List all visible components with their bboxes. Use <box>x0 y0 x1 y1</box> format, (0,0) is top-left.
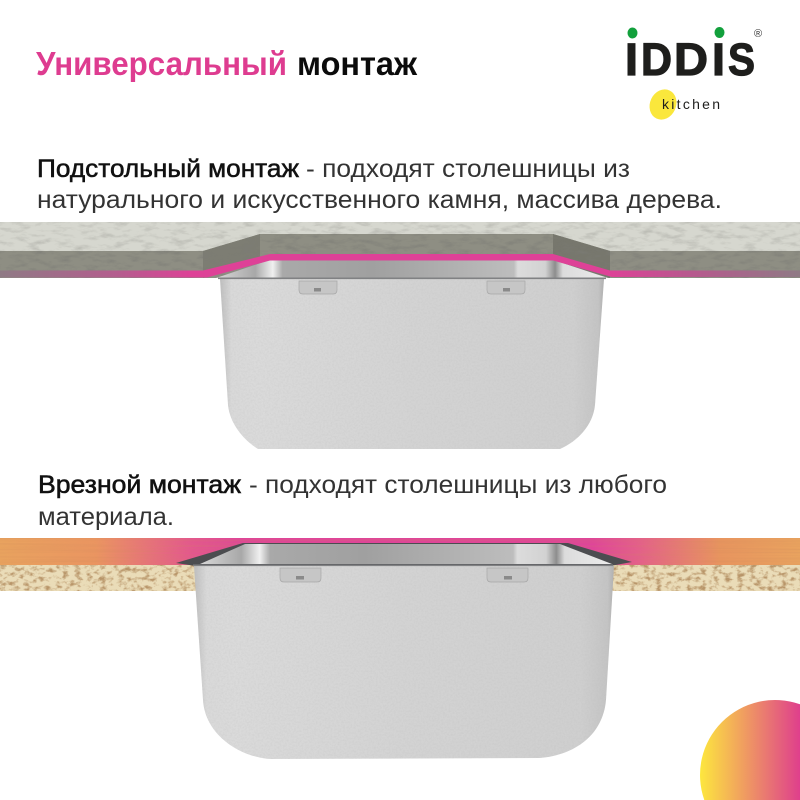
logo wordmark: I <box>625 34 638 85</box>
logo wordmark: S <box>728 34 755 85</box>
text block: under-counter mounting: Подстольный монтаж <box>37 155 299 183</box>
logo wordmark: D <box>674 34 708 85</box>
logo green dots <box>628 27 724 38</box>
sink body <box>215 278 610 450</box>
countertop stone <box>0 222 800 278</box>
text block: inset mounting: Врезной монтаж <box>38 471 241 499</box>
title <box>36 45 418 82</box>
clip left <box>299 281 337 294</box>
text block: under-counter mounting <box>37 155 722 214</box>
text block: under-counter mounting: натурального и искусственного камня, массива дерева. <box>37 186 722 214</box>
logo yellow blob <box>645 85 681 124</box>
logo kitchen text: kitchen <box>662 96 720 112</box>
logo wordmark: D <box>641 34 672 85</box>
sink body <box>190 566 620 760</box>
text block: inset mounting <box>38 471 667 531</box>
clip right <box>487 568 528 582</box>
illustration: under-counter sink <box>0 222 800 450</box>
clip left <box>280 568 321 582</box>
illustration: inset sink <box>0 538 800 760</box>
pink sealant band <box>0 254 800 278</box>
text block: under-counter mounting: - подходят столешницы из <box>306 155 630 183</box>
text block: inset mounting: - подходят столешницы из любого <box>249 471 667 499</box>
decorative gradient circle <box>700 700 800 800</box>
logo wordmark: I <box>712 34 725 85</box>
sink rim <box>218 278 606 279</box>
sink rim and interior <box>176 543 632 566</box>
countertop wood layer <box>0 538 800 565</box>
title: монтаж <box>297 45 418 82</box>
clip right <box>487 281 525 294</box>
text block: inset mounting: материала. <box>38 503 174 531</box>
registered mark: ® <box>754 28 762 40</box>
countertop chipboard layer <box>0 565 800 591</box>
title: Универсальный <box>36 45 287 82</box>
sink interior <box>216 260 608 278</box>
logo: IDDIS kitchen <box>625 27 762 124</box>
logo wordmark <box>625 34 755 85</box>
